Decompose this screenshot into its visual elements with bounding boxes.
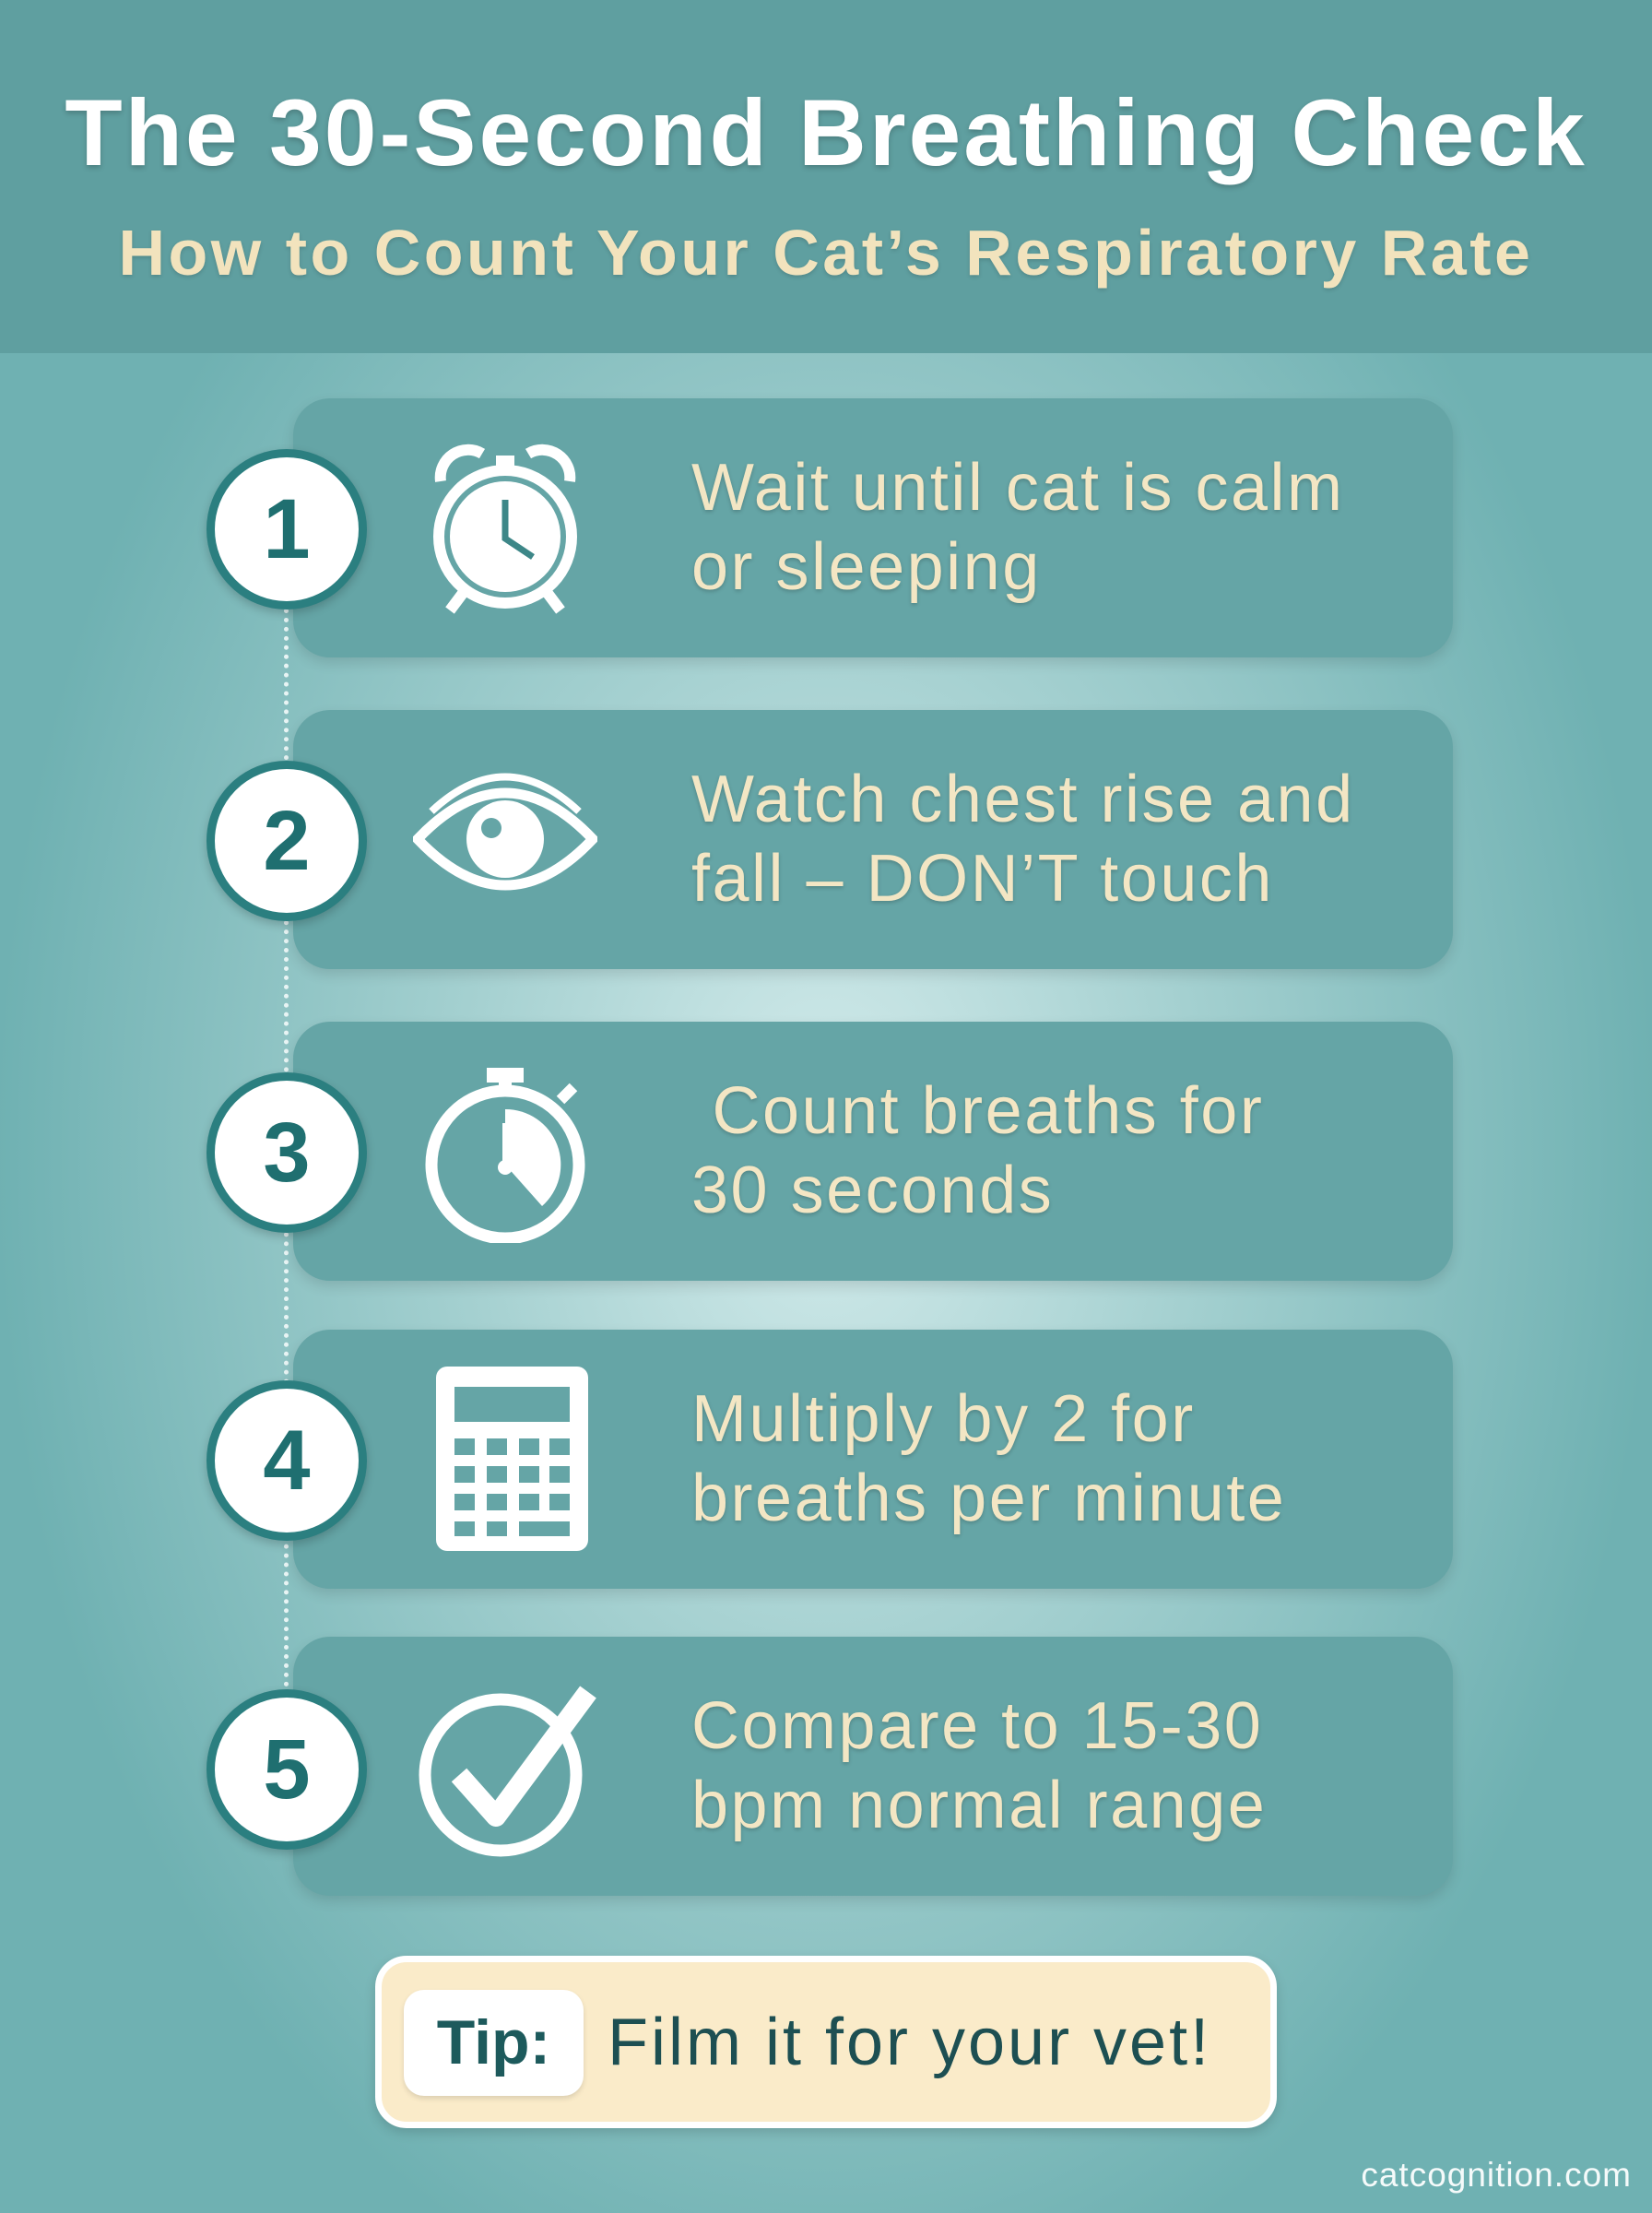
step 5 text: Compare to 15-30 — [691, 1689, 1263, 1763]
step 4 card — [293, 1330, 1453, 1589]
step 2 text: Watch chest rise and — [691, 763, 1355, 836]
step 4 text — [691, 1382, 1286, 1537]
step 2 number: 2 — [263, 794, 311, 888]
footer url: catcognition.com — [1361, 2156, 1632, 2194]
step 1 card — [293, 398, 1453, 657]
tip label — [404, 1990, 584, 2096]
step 4 text: Multiply by 2 for — [691, 1382, 1196, 1456]
header — [0, 0, 1652, 353]
step 3 number: 3 — [263, 1106, 311, 1200]
step 1 number: 1 — [263, 482, 311, 576]
step 1 text: Wait until cat is calm — [691, 451, 1344, 525]
icon: stopwatch — [426, 1068, 584, 1243]
tip callout — [375, 1956, 1277, 2128]
step 3 text: 30 seconds — [691, 1154, 1054, 1227]
step 4 number — [206, 1380, 367, 1541]
step 3 card — [293, 1022, 1453, 1281]
step 4 text: breaths per minute — [691, 1462, 1286, 1535]
step 1 text — [691, 451, 1344, 607]
step 4 number: 4 — [263, 1414, 311, 1508]
step 5 number: 5 — [263, 1722, 311, 1817]
step 3 text: Count breaths for — [712, 1074, 1264, 1148]
tip label: Tip: — [437, 2007, 550, 2077]
step 2 number — [206, 761, 367, 921]
step 3 text — [691, 1074, 1264, 1227]
step 2 text — [691, 763, 1355, 916]
icon: calculator — [436, 1367, 588, 1551]
step 5 text: bpm normal range — [691, 1769, 1267, 1842]
icon: alarm clock — [433, 444, 577, 614]
step 3 number — [206, 1072, 367, 1233]
tip text: Film it for your vet! — [608, 2006, 1211, 2079]
step 2 card — [293, 710, 1453, 969]
step 5 number — [206, 1689, 367, 1850]
step 5 card — [293, 1637, 1453, 1896]
step 2 text: fall – DON’T touch — [691, 842, 1274, 916]
subtitle: How to Count Your Cat’s Respiratory Rate — [118, 217, 1533, 289]
icon: eye — [413, 773, 597, 891]
step 1 text: or sleeping — [691, 530, 1042, 604]
step 5 text — [691, 1689, 1267, 1844]
step 1 number — [206, 449, 367, 609]
title: The 30-Second Breathing Check — [65, 80, 1587, 185]
icon: checkmark — [419, 1686, 596, 1857]
